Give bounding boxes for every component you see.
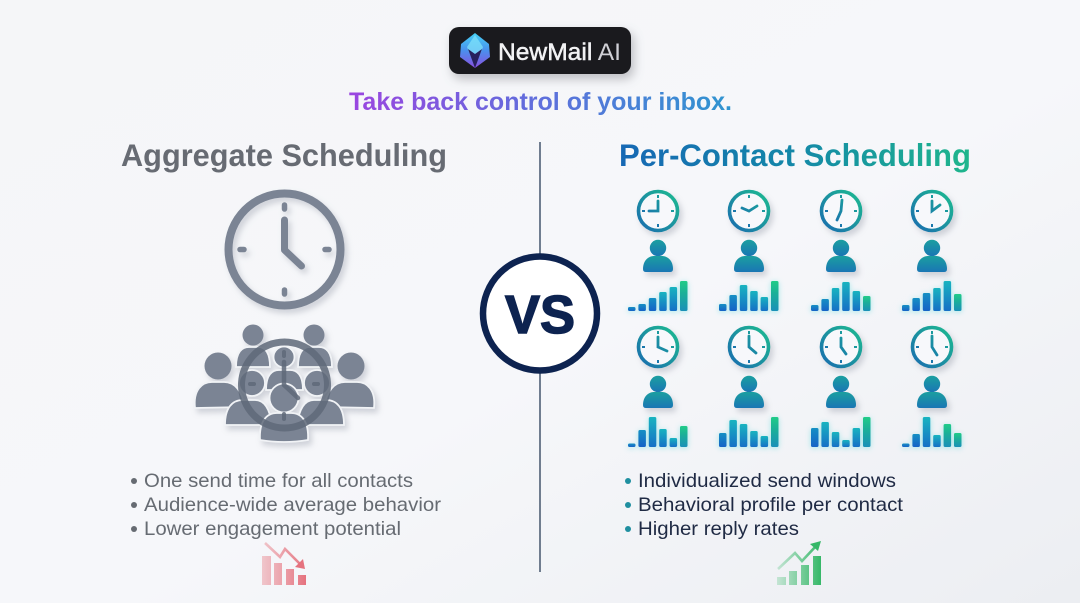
icon: audience group with clock (195, 324, 374, 442)
contact 6 (719, 328, 778, 447)
list: per-contact bullets: Higher reply rates (638, 518, 799, 540)
list: aggregate bullets (131, 470, 442, 540)
logo wordmark: NewMail AI (498, 39, 621, 66)
contact 5 (628, 328, 688, 447)
contact 1 (628, 192, 688, 311)
contact 3 (811, 192, 870, 311)
contact 2 (719, 192, 778, 311)
icon: gem logo (460, 33, 490, 68)
icon: large gray clock (228, 194, 340, 306)
list: per-contact bullets: Individualized send windows (638, 470, 896, 492)
list: aggregate bullets: Audience-wide average behavior (144, 494, 442, 516)
list: aggregate bullets: Lower engagement potential (144, 518, 401, 540)
icon: declining chart (262, 543, 306, 585)
center divider (539, 142, 541, 572)
contact 7 (811, 328, 870, 447)
list: aggregate bullets: One send time for all contacts (144, 470, 413, 492)
contact 8 (902, 328, 962, 447)
heading: per-contact scheduling: Per-Contact Scheduling (619, 137, 971, 173)
overlay clock (242, 342, 328, 428)
list: per-contact bullets: Behavioral profile per contact (638, 494, 904, 516)
contact 4 (902, 192, 962, 311)
logo badge (449, 27, 631, 74)
VS badge (483, 256, 597, 370)
list: per-contact bullets (625, 470, 904, 540)
tagline: Take back control of your inbox. (349, 88, 732, 116)
icon: rising chart (777, 541, 821, 585)
panel: per-contact grid (628, 192, 962, 447)
VS badge: VS (505, 285, 575, 345)
heading: aggregate scheduling: Aggregate Scheduling (121, 137, 447, 173)
